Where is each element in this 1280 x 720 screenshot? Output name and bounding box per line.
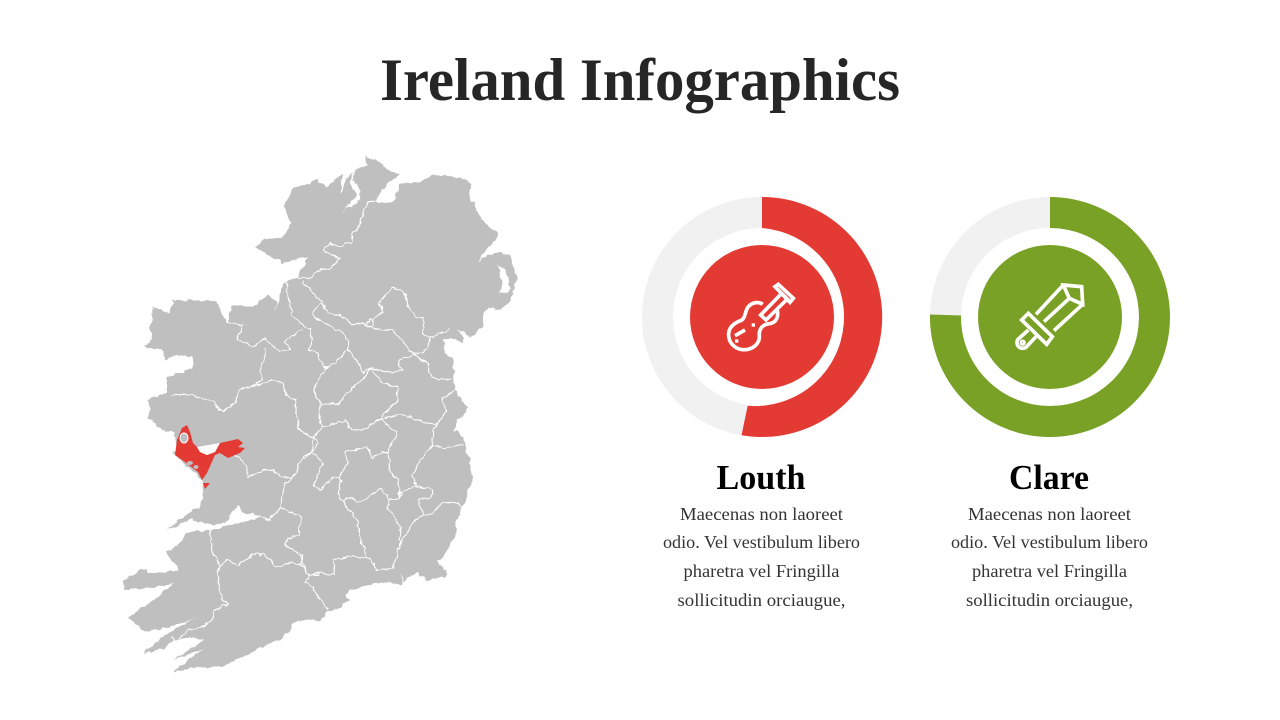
heading: Clare: Clare	[1009, 458, 1089, 497]
text: Clare description: Maecenas non laoreet	[968, 504, 1131, 524]
text: Louth description: odio. Vel vestibulum libero	[663, 532, 860, 552]
text: Clare description: pharetra vel Fringilla	[972, 561, 1127, 581]
icon: sword	[1017, 285, 1083, 348]
text: Louth description: Maecenas non laoreet	[680, 504, 843, 524]
heading: Louth: Louth	[716, 458, 806, 497]
island silhouette with county borders	[123, 157, 517, 672]
donut chart: Louth	[658, 197, 882, 437]
highlighted county: Clare	[175, 425, 245, 489]
text: Louth description: pharetra vel Fringilla	[684, 561, 840, 581]
text: Louth description	[663, 504, 860, 610]
title: Ireland Infographics	[380, 47, 900, 113]
panel: Clare	[930, 197, 1170, 610]
donut chart: Clare	[930, 197, 1170, 437]
map of Ireland	[123, 157, 517, 672]
text: Clare description	[951, 504, 1148, 610]
grey land east of the Clare coast	[204, 456, 234, 496]
text: Louth description: sollicitudin orciaugue,	[678, 590, 846, 610]
panel: Louth	[658, 197, 882, 610]
text: Clare description: odio. Vel vestibulum libero	[951, 532, 1148, 552]
text: Clare description: sollicitudin orciaugue,	[966, 590, 1133, 610]
icon: violin	[729, 284, 793, 350]
